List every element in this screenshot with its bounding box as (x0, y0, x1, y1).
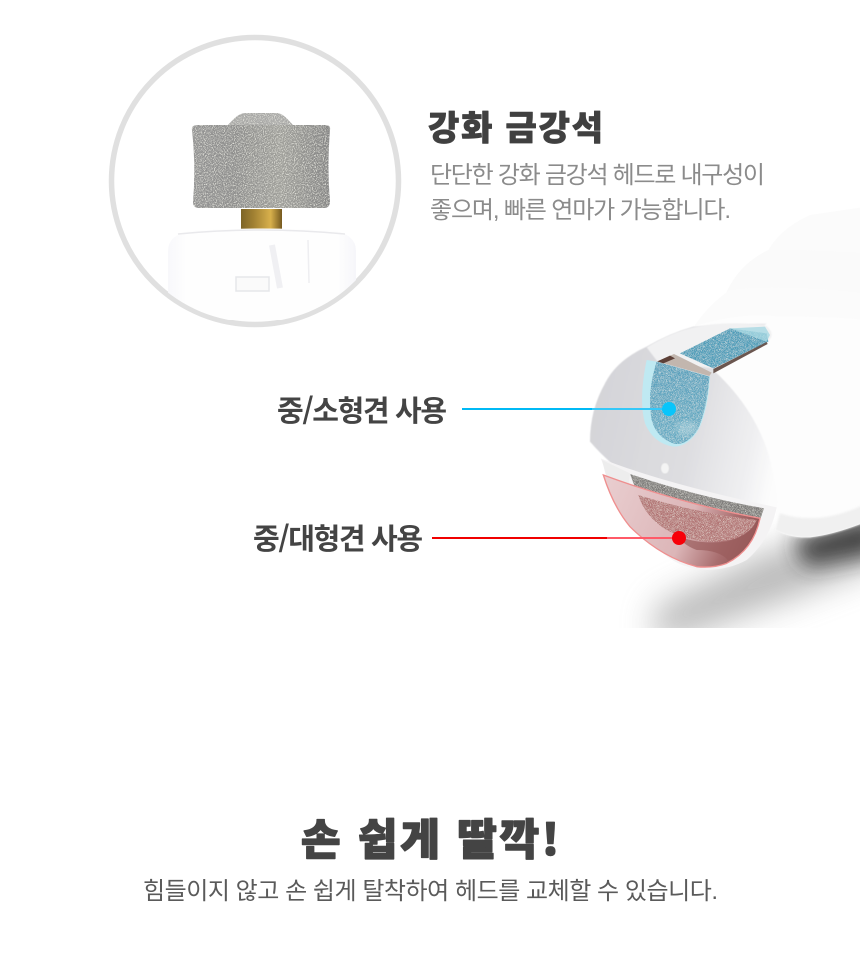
panel: grinder device photo (590, 324, 860, 628)
callout: red leader line (432, 531, 686, 545)
text: description: 단단한 강화 금강석 헤드로 내구성이 (430, 162, 765, 189)
text: description (430, 162, 765, 224)
device body (778, 500, 860, 539)
heading: reinforced diamond: 강화 금강석 (428, 101, 603, 150)
text: bottom description: 힘들이지 않고 손 쉽게 탈착하여 헤드를 교체할 수 있습니다. (143, 878, 718, 905)
small pin detail (661, 463, 669, 474)
panel: diamond head photo in circle (112, 38, 398, 324)
circle frame (112, 38, 398, 324)
device shadow (640, 524, 860, 628)
upper blue abrasive window (642, 327, 770, 447)
callout: blue leader line (462, 402, 676, 416)
label: medium and large dogs: 중/대형견 사용 (253, 516, 423, 558)
lower slot and red abrasive head (601, 458, 777, 570)
heading: easy click: 손 쉽게 딸깍! (301, 806, 559, 868)
icon: diamond grinding head (168, 113, 356, 320)
label: small and medium dogs: 중/소형견 사용 (277, 388, 447, 430)
device head face (590, 323, 777, 507)
text: description: 좋으며, 빠른 연마가 가능합니다. (430, 197, 731, 224)
